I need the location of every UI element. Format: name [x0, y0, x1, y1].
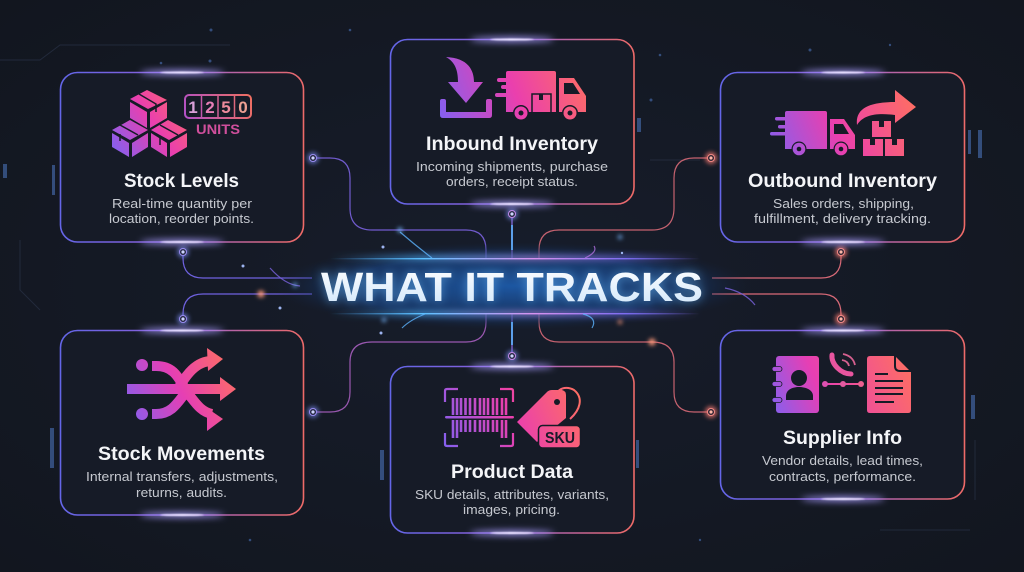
icon: barcode scanner [445, 389, 514, 446]
connector nodes [177, 152, 847, 418]
icon: outbound arrow and boxes [857, 90, 916, 156]
description: Vendor details, lead times, [762, 453, 923, 468]
icon: stacked boxes [112, 90, 187, 157]
icon: SKU tag [517, 388, 580, 448]
description: Real-time quantity per [112, 196, 253, 211]
central title glow band [242, 225, 755, 346]
heading: Product Data [451, 462, 573, 483]
icon: diverging arrows [127, 348, 236, 431]
icon: document [867, 356, 911, 413]
description: SKU details, attributes, variants, [415, 487, 609, 502]
icon: unit counter: 0 [238, 98, 248, 117]
description: Sales orders, shipping, [773, 196, 914, 211]
description [754, 196, 931, 226]
title: WHAT IT TRACKS: WHAT IT TRACKS [321, 264, 703, 310]
description: images, pricing. [463, 502, 560, 517]
description [762, 453, 923, 484]
description: location, reorder points. [109, 211, 254, 226]
icon: unit counter: 2 [205, 98, 215, 117]
icon: SKU tag: SKU [545, 430, 575, 447]
description: orders, receipt status. [446, 174, 578, 189]
icon: unit counter: 1 [188, 98, 198, 117]
icon: unit counter [185, 95, 251, 137]
description [415, 487, 609, 517]
panel: outbound inventory [720, 70, 964, 244]
heading: Supplier Info [783, 428, 902, 449]
description [86, 469, 278, 500]
heading: Inbound Inventory [426, 134, 598, 155]
icon: unit counter: UNITS [196, 121, 240, 137]
description: fulfillment, delivery tracking. [754, 211, 931, 226]
panel: product data [390, 364, 634, 536]
icon: phone link [822, 354, 864, 387]
icon: outbound truck [770, 111, 855, 156]
icon: contact book [772, 356, 819, 413]
panel: stock levels [60, 70, 304, 244]
description [109, 196, 254, 226]
panel: inbound inventory [390, 37, 634, 206]
description: Incoming shipments, purchase [416, 159, 608, 174]
icon: download arrow and tray [440, 57, 492, 118]
description: returns, audits. [136, 485, 227, 500]
connector lines [183, 158, 841, 412]
description: Internal transfers, adjustments, [86, 469, 278, 484]
panel: supplier info [720, 328, 964, 502]
heading: Stock Movements [98, 444, 265, 465]
icon: unit counter: 5 [221, 98, 231, 117]
description: contracts, performance. [769, 469, 916, 484]
description [416, 159, 608, 189]
heading: Outbound Inventory [748, 171, 937, 192]
panel: stock movements [60, 328, 304, 518]
heading: Stock Levels [124, 171, 239, 192]
title: WHAT IT TRACKS: WHAT IT TRACKS [321, 264, 703, 310]
icon: inbound truck [495, 71, 586, 121]
